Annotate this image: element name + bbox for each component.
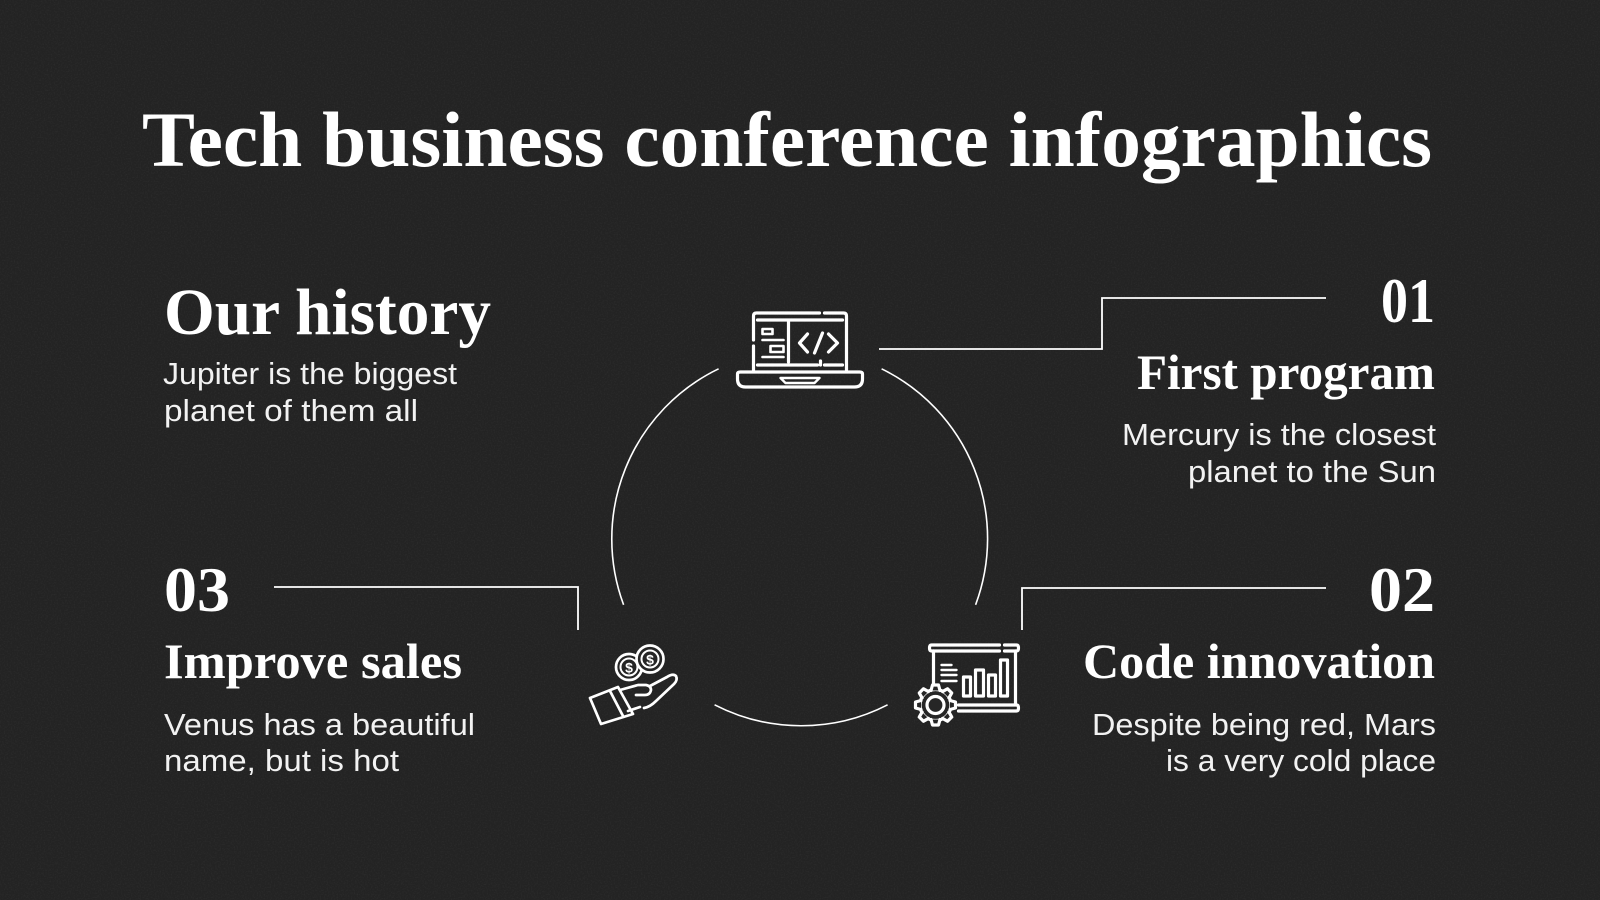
text block: our history: Jupiter is the biggest xyxy=(163,356,457,391)
text block: 02 code innovation: is a very cold place xyxy=(1166,743,1436,778)
text block: 03 improve sales xyxy=(164,554,475,778)
connector: chart to 02 xyxy=(1022,588,1326,630)
text block: 02 code innovation: Code innovation xyxy=(1083,633,1435,689)
icon: hand holding coins: $ xyxy=(646,652,654,668)
text block: 01 first program: First program xyxy=(1137,344,1435,400)
connector: laptop to 01 xyxy=(879,298,1326,349)
text block: 01 first program: Mercury is the closest xyxy=(1122,417,1436,452)
icon: hand holding coins: $ xyxy=(625,660,633,676)
text block: 01 first program xyxy=(1122,265,1436,489)
text block: 03 improve sales: 03 xyxy=(164,554,230,625)
text block: 03 improve sales: Venus has a beautiful xyxy=(164,707,475,742)
gear xyxy=(916,685,956,725)
cycle ring arcs xyxy=(612,369,988,726)
text block: 01 first program: 01 xyxy=(1381,265,1435,336)
title: Tech business conference infographics xyxy=(142,96,1432,183)
text block: 03 improve sales: Improve sales xyxy=(164,633,462,689)
text block: 02 code innovation: 02 xyxy=(1369,554,1435,625)
text block: our history: planet of them all xyxy=(164,393,418,428)
connector: hand to 03 xyxy=(274,587,578,630)
text block: 02 code innovation xyxy=(1083,554,1436,778)
text block: 01 first program: planet to the Sun xyxy=(1188,454,1436,489)
text block: 03 improve sales: name, but is hot xyxy=(164,743,399,778)
text block: our history xyxy=(163,276,491,428)
icon: presentation board with gear xyxy=(916,645,1018,725)
text block: our history: Our history xyxy=(164,276,491,349)
icon: hand holding coins xyxy=(590,646,677,724)
icon: laptop with code xyxy=(738,313,862,387)
text block: 02 code innovation: Despite being red, Mars xyxy=(1092,707,1436,742)
